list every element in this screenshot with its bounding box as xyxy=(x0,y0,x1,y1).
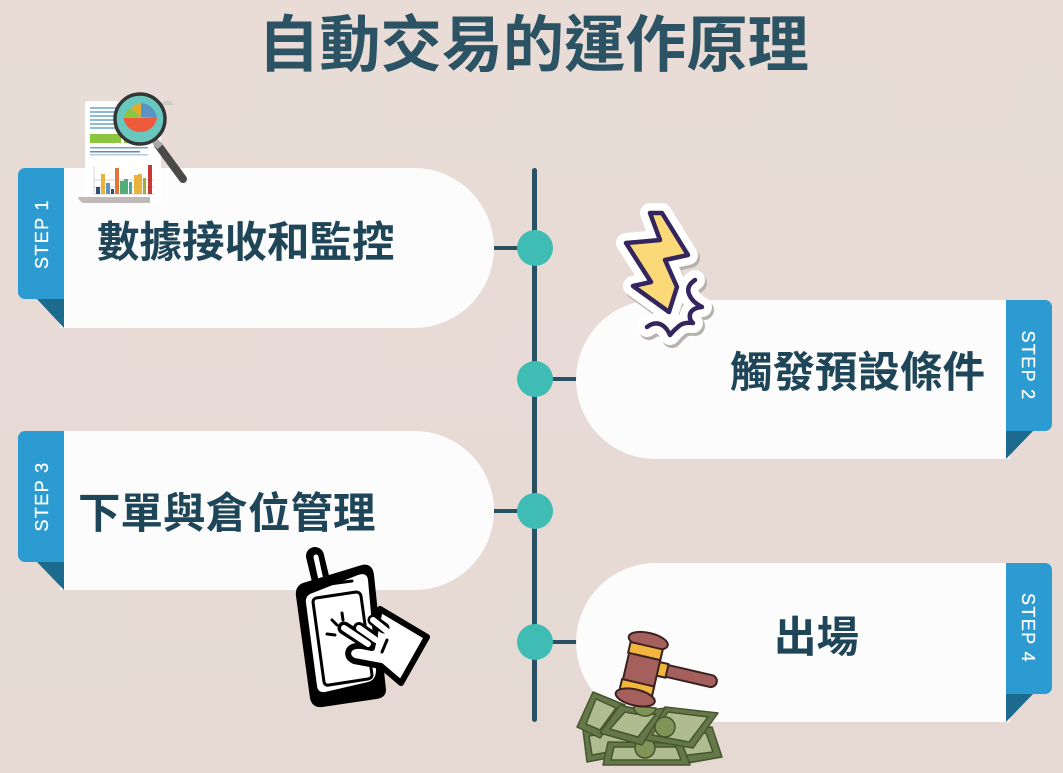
icon: report with magnifier xyxy=(78,94,183,203)
step 4 heading: 出場 xyxy=(774,615,859,662)
panel: step 3 xyxy=(18,431,494,590)
panel: step 2 xyxy=(576,300,1052,459)
icon: lightning bolt xyxy=(626,213,704,338)
step 3 heading: 下單與倉位管理 xyxy=(78,491,376,538)
panel: step 1 xyxy=(18,168,494,328)
step 2 label: STEP 2 xyxy=(1018,330,1038,401)
icon: gavel on money xyxy=(577,629,724,765)
title: 自動交易的運作原理 xyxy=(258,11,809,79)
step 3 label: STEP 3 xyxy=(32,461,52,532)
step 1 heading: 數據接收和監控 xyxy=(97,220,395,267)
step 2 heading: 觸發預設條件 xyxy=(730,350,985,397)
panel: step 4 xyxy=(576,563,1052,722)
icon: phone with tapping hand xyxy=(298,556,427,705)
node 1 xyxy=(517,230,553,266)
step 4 label: STEP 4 xyxy=(1018,593,1038,663)
timeline axis xyxy=(494,168,577,722)
step 1 label: STEP 1 xyxy=(32,199,52,269)
node 2 xyxy=(517,361,553,397)
node 4 xyxy=(517,624,553,660)
node 3 xyxy=(517,493,553,529)
